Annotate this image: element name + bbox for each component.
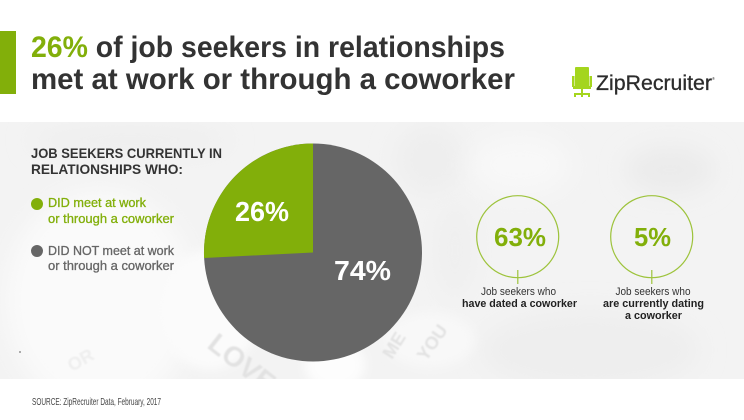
stat caption: Job seekers who [481,286,556,298]
legend heading: JOB SEEKERS CURRENTLY IN [31,145,222,161]
stat caption: are currently dating [603,298,704,310]
logo wordmark: ZipRecruiter [596,72,712,95]
legend item: did meet [31,196,174,226]
stat caption: Job seekers who [616,286,690,298]
stat: 5% currently dating a coworker [603,196,704,322]
photo background band: LOVE [202,327,281,399]
logo: ZipRecruiter [572,67,715,97]
stat circle [611,196,693,278]
stat value: 63% [494,222,546,252]
accent bar [0,31,16,94]
photo background band [0,122,744,379]
pie slice: 26% [204,143,313,258]
photo background band: OR [64,345,97,375]
legend heading: RELATIONSHIPS WHO: [31,161,183,177]
stat: 63% have dated a coworker [462,196,578,310]
pie slice: 74% [204,144,422,362]
pie label: 74%: 74% [334,255,391,286]
stat caption [462,286,578,310]
pie chart [204,143,422,362]
source note: SOURCE: ZipRecruiter Data, February, 2017 [32,396,161,408]
legend item: did not meet: or through a coworker [48,259,174,273]
small speck [19,351,21,353]
legend item: did meet: DID meet at work [48,196,147,210]
legend item: did meet: or through a coworker [48,212,174,226]
legend item: did not meet [31,244,175,273]
photo background band: ME [378,329,410,362]
stat caption: a coworker [625,310,683,322]
logo: ZipRecruiter: ® [712,76,715,81]
title: met at work or through a coworker [31,63,515,96]
stat circle [477,196,559,278]
stat value: 5% [634,222,671,252]
legend panel [31,145,222,273]
stat caption [603,286,704,322]
pie label: 26%: 26% [235,196,289,227]
legend item: did not meet: DID NOT meet at work [48,244,175,258]
icon: office chair [572,67,592,97]
stat caption: have dated a coworker [462,298,578,310]
photo background band: YOU [413,321,452,364]
title: 26% of job seekers in relationships [31,31,505,64]
legend heading [31,145,222,177]
title [31,31,515,96]
